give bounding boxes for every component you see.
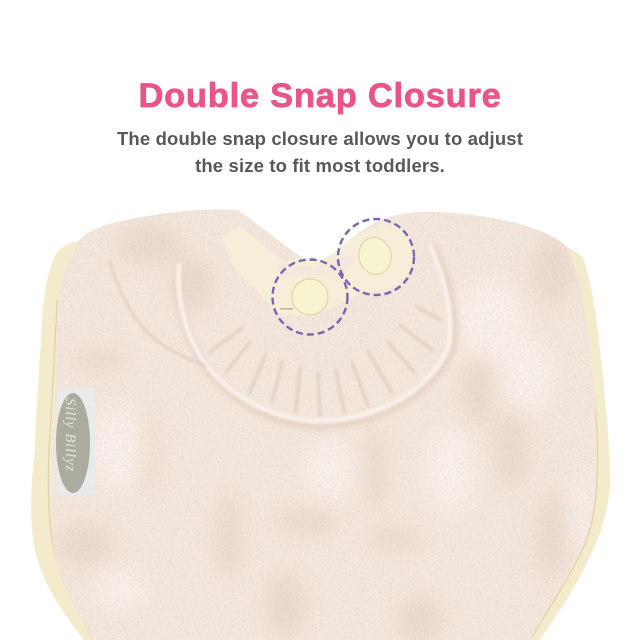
- dashed highlight circle lower: [272, 260, 348, 334]
- snap button lower: [280, 279, 328, 315]
- bib photo illustration: [31, 209, 610, 640]
- towel texture: [51, 212, 596, 640]
- title: Double Snap Closure: [138, 77, 502, 115]
- cream piping edge: [31, 241, 610, 640]
- towel shading: [51, 212, 596, 640]
- dashed highlight circle upper: [338, 219, 414, 295]
- description: [117, 128, 523, 176]
- yoke seam: [110, 246, 454, 426]
- neck inner lining: [222, 224, 414, 316]
- gathered neck ruffles: [210, 306, 440, 416]
- snap button upper: [356, 235, 394, 277]
- collar strip between snaps: [284, 258, 350, 273]
- description: The double snap closure allows you to adjust: [117, 128, 523, 149]
- description: the size to fit most toddlers.: [195, 155, 445, 176]
- terry towel body: [50, 209, 596, 640]
- brand tag: [56, 388, 95, 495]
- brand tag text: Silly Billyz: [62, 398, 78, 472]
